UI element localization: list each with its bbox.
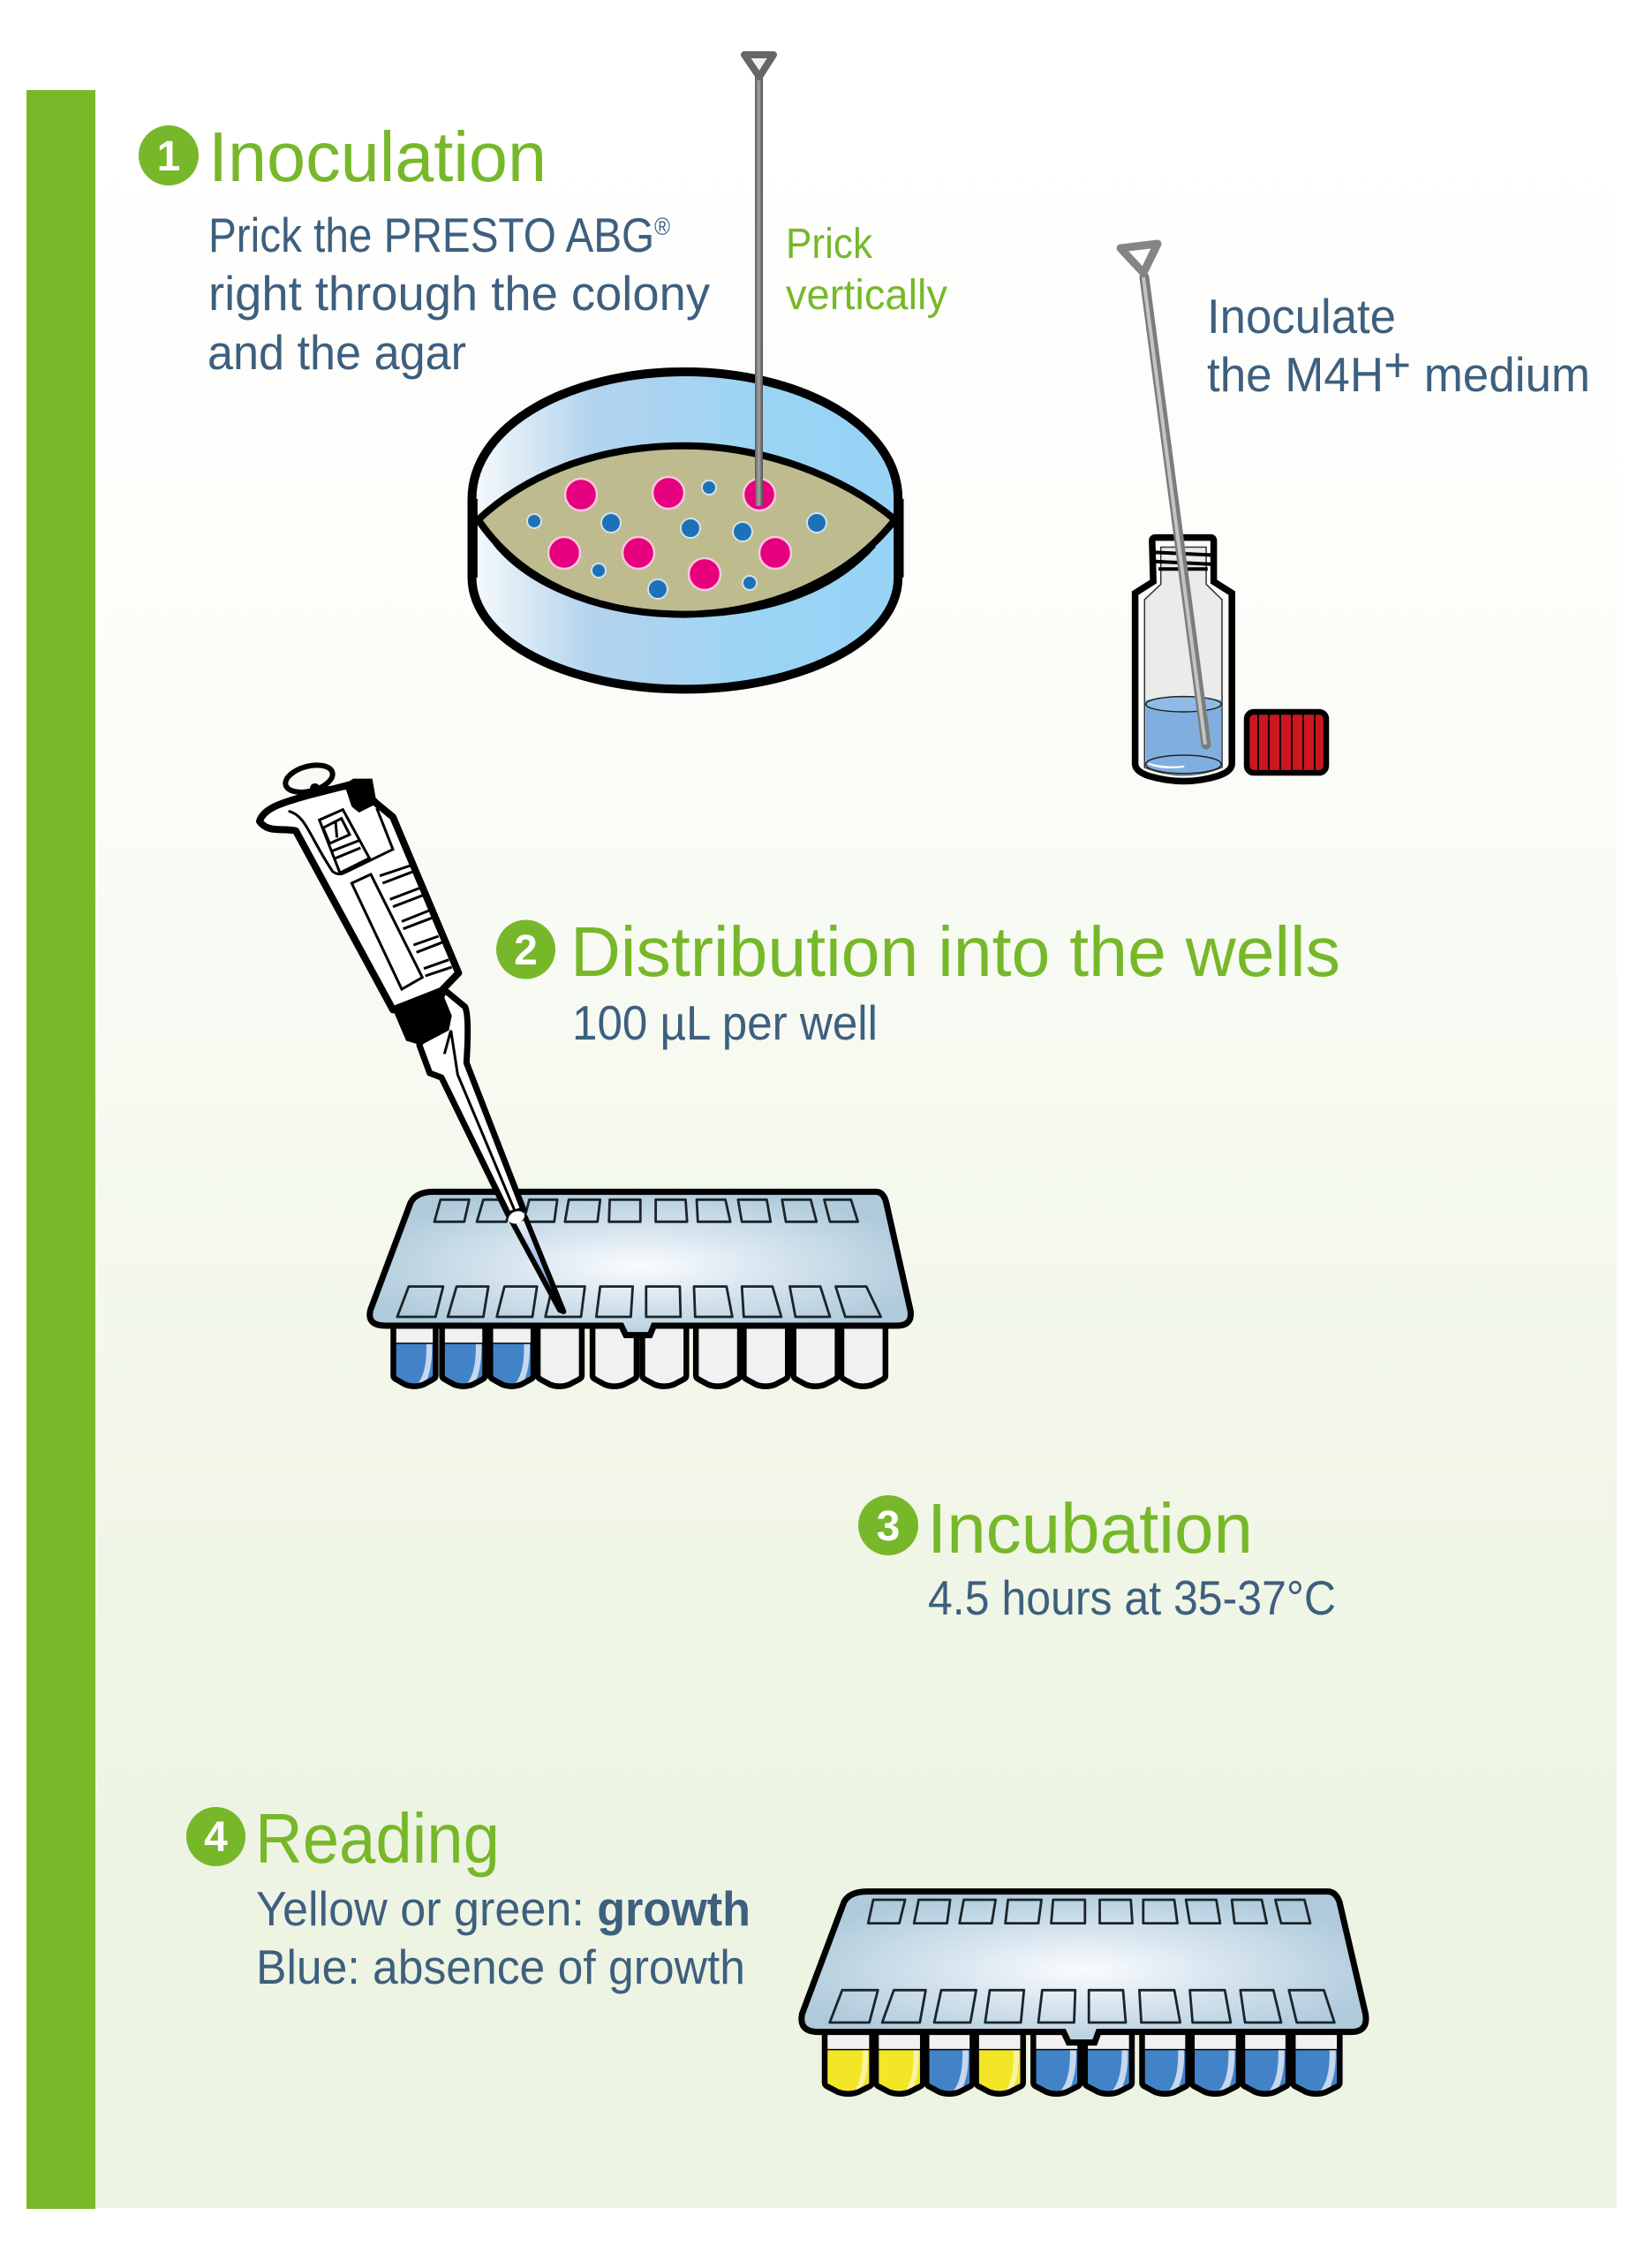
- blue colonies: [527, 480, 826, 599]
- text: step 3 conditions: 4.5 hours at 35-37°C: [928, 1570, 1336, 1625]
- text: reading interpretation: [256, 1881, 751, 1994]
- coloured wells row: [825, 2031, 1339, 2094]
- annotation: prick vertically: [786, 221, 947, 319]
- text: inoculate medium: Inoculate: [1207, 289, 1396, 344]
- pipette shaft: [419, 990, 524, 1214]
- heading: step 2 Distribution: Distribution into the wells: [570, 912, 1340, 991]
- green side bar: [26, 90, 95, 2209]
- vial with medium: [1135, 538, 1232, 781]
- text: step 1 instructions: right through the colony: [208, 266, 710, 321]
- text: inoculate medium: +: [1384, 337, 1411, 392]
- annotation: prick vertically: vertically: [786, 272, 947, 319]
- petri dish with colonies: [468, 372, 903, 689]
- text: step 1 instructions: [207, 208, 710, 380]
- pipette tip: [512, 1217, 563, 1312]
- heading: step 1 Inoculation: 1: [157, 133, 180, 180]
- heading: step 3 Incubation: Incubation: [927, 1489, 1253, 1568]
- text: step 1 instructions: Prick the PRESTO ABG: [208, 208, 723, 262]
- test plate with first three wells filled: [370, 1191, 910, 1387]
- plate lid: [370, 1191, 910, 1335]
- text: inoculate medium: [1207, 289, 1590, 402]
- plate windows: [830, 1900, 1334, 2023]
- inoculation loop in vial: [1120, 244, 1206, 745]
- heading: step 4 Reading: Reading: [255, 1799, 500, 1878]
- annotation: prick vertically: Prick: [786, 221, 873, 268]
- text: reading interpretation: Blue: absence of growth: [256, 1940, 745, 1994]
- heading: step 4 Reading: 4: [204, 1814, 228, 1861]
- heading: step 1 Inoculation: Inoculation: [208, 117, 547, 196]
- thumb plunger: [283, 760, 336, 797]
- text: inoculate medium: medium: [1411, 347, 1590, 402]
- test plate with reading result: [802, 1892, 1366, 2094]
- text: step 1 instructions: ®: [654, 213, 670, 240]
- plate windows: [397, 1199, 881, 1317]
- text: inoculate medium: the M4H: [1207, 347, 1391, 402]
- pink colonies: [548, 477, 791, 590]
- pipette: [260, 760, 563, 1312]
- text: reading interpretation: Yellow or green: growth: [256, 1881, 751, 1936]
- heading: step 3 Incubation: 3: [877, 1503, 900, 1550]
- pipette body: [260, 783, 458, 1010]
- text: step 2 volume: 100 µL per well: [572, 995, 878, 1050]
- text: step 1 instructions: and the agar: [207, 325, 466, 380]
- wells row: [394, 1326, 886, 1387]
- inoculation loop vertical: [744, 55, 773, 506]
- plate lid: [802, 1892, 1366, 2043]
- heading: step 2 Distribution: 2: [514, 927, 538, 974]
- red vial cap: [1247, 712, 1326, 773]
